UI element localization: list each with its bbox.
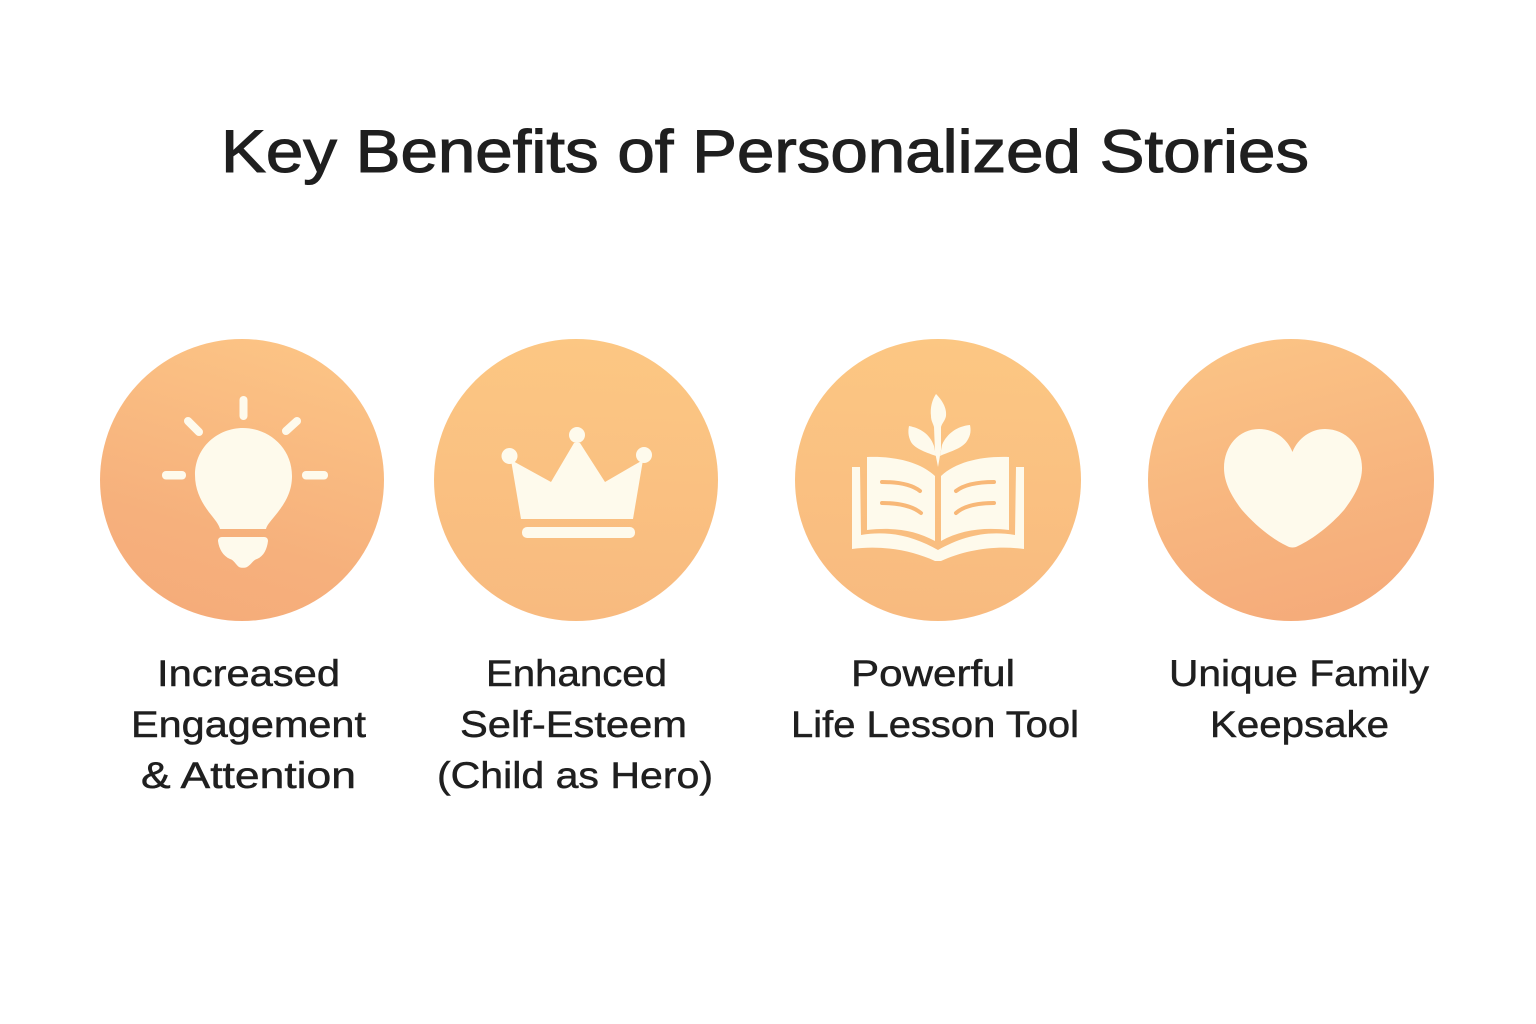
circle: heart badge: [1148, 339, 1434, 621]
icon: crown: [502, 427, 652, 538]
panel: unique family keepsake: [1148, 339, 1434, 745]
panel: powerful life lesson tool: [791, 339, 1081, 745]
label: Keepsake: [1210, 703, 1389, 745]
label: Self-Esteem: [460, 703, 687, 745]
icon: heart: [1224, 429, 1362, 548]
circle: book badge: [795, 339, 1081, 621]
panel: increased engagement and attention: [100, 339, 384, 796]
title: Key Benefits of Personalized Stories: [221, 118, 1309, 185]
icon: open book with sprout: [852, 394, 1024, 561]
label: & Attention: [141, 754, 356, 796]
label: Enhanced: [486, 652, 667, 694]
label: (Child as Hero): [437, 754, 713, 796]
label: Engagement: [131, 703, 367, 745]
circle: lightbulb badge: [100, 339, 384, 621]
book pages and cover: [852, 457, 1024, 561]
sprout: [908, 394, 971, 467]
label: [1169, 652, 1429, 745]
label: [437, 652, 713, 796]
icon: lightbulb: [162, 396, 328, 568]
label: Life Lesson Tool: [791, 703, 1079, 745]
label: [791, 652, 1079, 745]
label: [131, 652, 367, 796]
panel: enhanced self-esteem: [434, 339, 718, 796]
label: Unique Family: [1169, 652, 1429, 694]
page lines: [882, 482, 994, 513]
label: Increased: [157, 652, 340, 694]
circle: crown badge: [434, 339, 718, 621]
label: Powerful: [851, 652, 1015, 694]
